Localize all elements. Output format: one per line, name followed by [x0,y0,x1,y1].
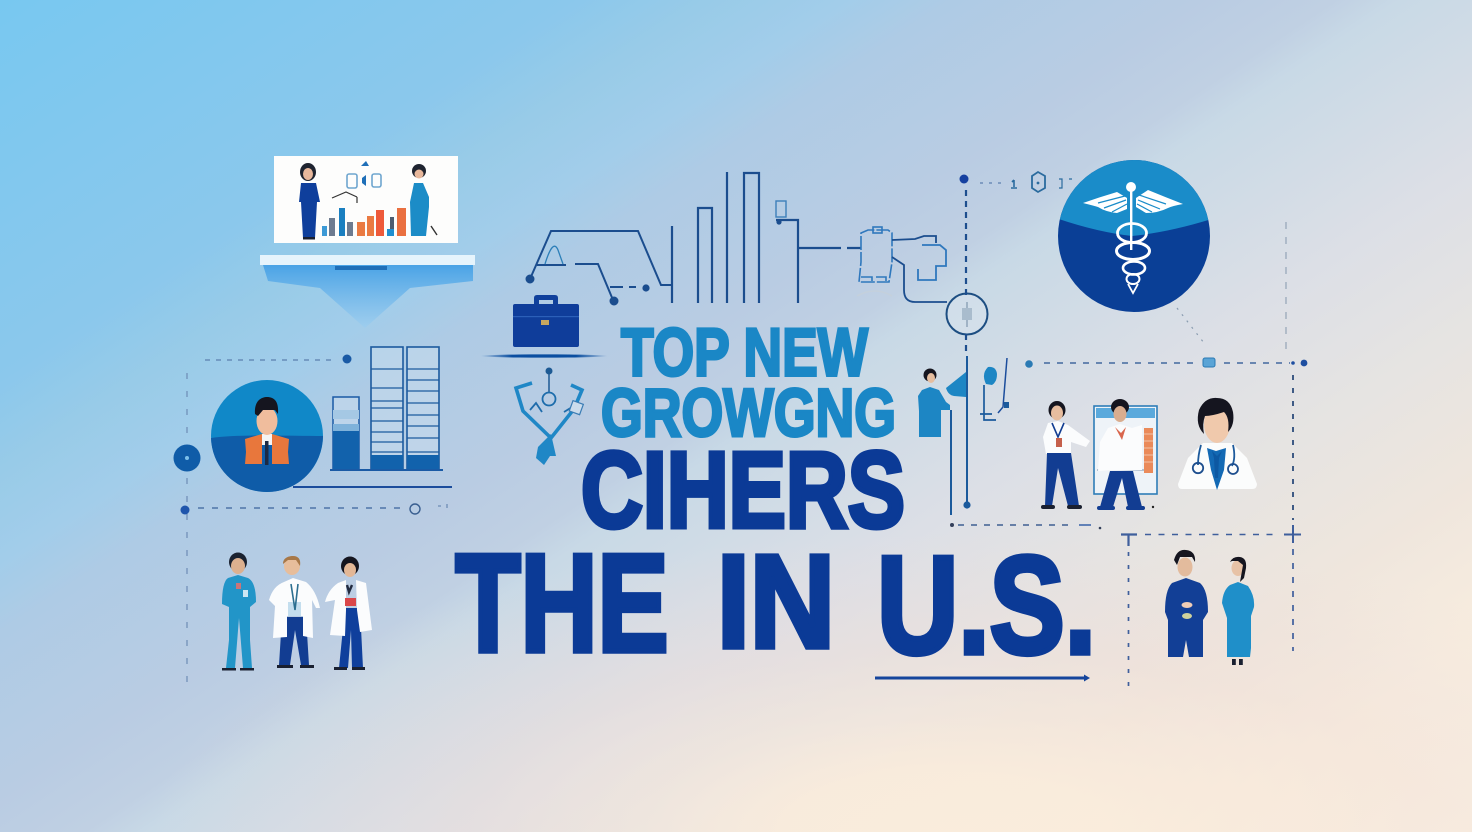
connector dot [342,354,352,364]
dashed connector with nodes [180,504,447,514]
node circle [174,444,200,472]
staff in navy uniform [1165,550,1208,657]
title underline arrow [875,674,1090,682]
left dashed vertical [186,373,188,690]
presenter right [410,164,437,236]
floating icons [332,161,381,203]
small device icon [776,201,786,225]
icon: briefcase [480,295,608,358]
staff in teal uniform [1222,557,1254,665]
staff member in teal scrubs [222,552,256,670]
title line: growgng: GROWGNG [601,375,896,451]
dashed frame [1025,358,1307,520]
machine outline with tube [892,236,947,302]
clipboard outline [857,227,892,296]
panel: three medical staff [180,504,447,670]
baseline [293,486,452,488]
funnel shadow under laptop [263,265,473,328]
caduceus staff and wings [1083,182,1183,250]
title word: in: IN [717,528,835,675]
laptop base [260,255,475,265]
title line: top new: TOP NEW [621,314,869,390]
title word: the: THE [456,526,668,681]
dashed frame [1121,525,1301,692]
dashed connector top [205,359,335,361]
icon: stethoscope [516,368,583,465]
icon: caduceus badge [1058,160,1210,312]
mini bar chart [322,208,406,236]
staff member in white coat [269,556,320,668]
title [456,314,1096,683]
dashed base line [950,523,1101,529]
snake coils [1116,224,1150,293]
panel: two staff in frame [1121,525,1301,692]
hexagon connector top right [980,172,1072,192]
doctor at chart board [1094,399,1157,510]
circuit line left [526,231,672,304]
title word: u.s.: U.S. [877,528,1096,683]
title line: cihers: CIHERS [581,429,905,550]
doctor with lanyard [1041,401,1090,509]
dotted link from badge [1177,308,1204,343]
panel: person badge and bar graph [174,347,452,690]
panel: upper network diagram [526,172,988,334]
lamp [946,372,966,397]
panel: doctors frame [1025,222,1307,520]
bar graph [330,347,443,471]
panel: lab worker and central axis [918,174,1101,529]
doctor bust with stethoscope [1178,398,1257,490]
node dial [946,294,988,334]
person badge [211,380,323,492]
line bar outlines [672,172,861,303]
presentation screen [274,156,458,243]
hanging bulb instrument [980,358,1009,420]
laptop with presentation screen [260,156,475,328]
dashed right upper line [1285,222,1287,350]
axis with top node [950,174,971,515]
staff member holding clipboard [325,556,372,670]
presenter left [299,163,320,240]
lab worker [918,368,950,437]
